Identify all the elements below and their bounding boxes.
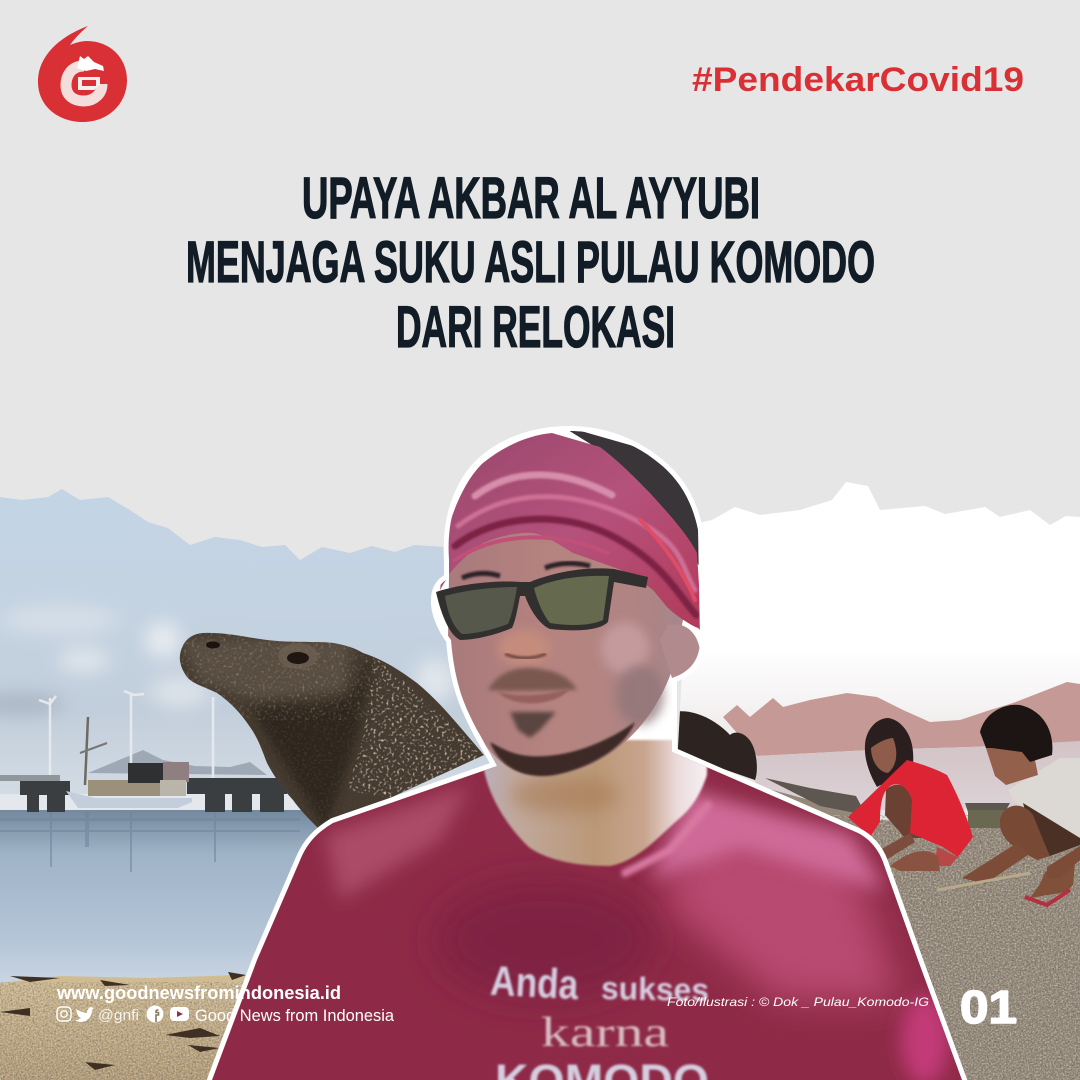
girl arm <box>880 833 915 860</box>
headband <box>440 433 702 632</box>
social handle: @gnfi <box>98 1007 139 1024</box>
headband folds <box>455 475 696 615</box>
website: www.goodnewsfromindonesia.id <box>56 983 341 1003</box>
boy leg <box>1000 806 1050 860</box>
boy <box>937 705 1080 905</box>
icon: twitter <box>75 1007 94 1022</box>
left lens <box>445 587 517 634</box>
girl <box>848 718 973 871</box>
girl hair <box>865 718 913 787</box>
cheek highlight <box>601 622 649 674</box>
shirt shading <box>325 785 949 1080</box>
sunglasses <box>436 568 648 640</box>
icon: youtube <box>170 1007 189 1021</box>
water reflections <box>0 820 300 872</box>
right lens <box>534 576 609 625</box>
girl face <box>871 738 896 773</box>
beach <box>770 790 1080 1080</box>
low wall <box>968 810 1008 828</box>
jaw beard <box>490 722 635 776</box>
komodo eye ridge <box>278 643 318 669</box>
girl red top <box>848 760 973 857</box>
distant hills <box>88 750 267 775</box>
icon: instagram <box>57 1007 71 1021</box>
logo emblem ring <box>66 66 102 101</box>
panel: right photo, children on beach <box>660 480 1080 1080</box>
boy face <box>985 735 1038 785</box>
street lamps <box>39 691 213 778</box>
white outline <box>212 431 962 1080</box>
collar fold <box>625 805 708 873</box>
shirt <box>200 752 980 1080</box>
photo credit: Foto/Ilustrasi : © Dok _ Pulau_Komodo-IG <box>667 995 929 1009</box>
neck shadow <box>510 777 620 813</box>
page number: 01 <box>960 981 1017 1033</box>
white sky <box>680 482 1080 734</box>
komodo eye <box>287 652 309 664</box>
beach texture <box>830 815 1080 1080</box>
illustration: man portrait with white cut-out outline <box>200 425 980 1080</box>
komodo dark scales <box>180 630 480 830</box>
stubble right <box>616 665 664 725</box>
sand <box>0 975 246 1080</box>
hashtag: #PendekarCovid19 <box>692 61 1024 99</box>
boy arm <box>962 843 1028 884</box>
boy stick <box>937 873 1030 890</box>
icon: facebook <box>146 1006 164 1022</box>
komodo head tone <box>180 640 350 700</box>
page name: Good News from Indonesia <box>195 1006 395 1025</box>
boy shin and foot <box>1030 862 1075 898</box>
pink mountains <box>723 682 1080 756</box>
eyebrows <box>462 563 590 578</box>
title: UPAYA AKBAR AL AYYUBI <box>302 166 760 231</box>
komodo nostril <box>206 642 220 648</box>
boy sandal <box>1025 890 1070 905</box>
nose <box>498 630 550 666</box>
lip <box>498 688 570 703</box>
sky <box>0 480 520 810</box>
girl legs <box>885 785 925 838</box>
clouds <box>0 606 455 714</box>
shirt slogan <box>489 957 709 1080</box>
girl shorts <box>935 847 958 866</box>
logo emblem inner bar <box>78 77 100 90</box>
komodo head scales <box>180 630 370 720</box>
goatee <box>510 712 556 738</box>
boy hair <box>980 705 1052 762</box>
horizon strip <box>0 794 300 810</box>
panel: left photo, Komodo harbour <box>0 480 520 1080</box>
boy shirt <box>1008 758 1080 838</box>
shirt slogan: Anda <box>489 957 580 1008</box>
sand texture <box>0 982 244 1080</box>
dark shoreline rocks <box>765 778 861 812</box>
girl foot <box>890 851 940 871</box>
hair <box>560 425 705 570</box>
ear <box>660 624 700 678</box>
sea <box>740 741 1080 810</box>
footer: website and socials <box>56 983 395 1025</box>
logo: GNFI red mark <box>38 26 127 122</box>
hidden child head <box>674 711 757 780</box>
seaweed <box>0 972 246 1070</box>
boat <box>66 717 192 808</box>
illustration: komodo dragon <box>180 632 484 828</box>
boy shorts <box>1023 803 1080 856</box>
jetty <box>0 775 287 812</box>
face <box>448 520 705 775</box>
shirt slogan: karna <box>541 1010 669 1056</box>
komodo bright neck scales <box>348 658 482 798</box>
title <box>186 166 875 360</box>
water <box>0 810 318 983</box>
logo eagle head <box>77 56 104 71</box>
nostril shadow <box>505 654 546 658</box>
shirt slogan: sukses <box>601 970 709 1008</box>
komodo throat shadow <box>250 650 372 830</box>
moustache <box>488 668 577 691</box>
title: DARI RELOKASI <box>396 295 675 360</box>
neck <box>484 740 707 866</box>
